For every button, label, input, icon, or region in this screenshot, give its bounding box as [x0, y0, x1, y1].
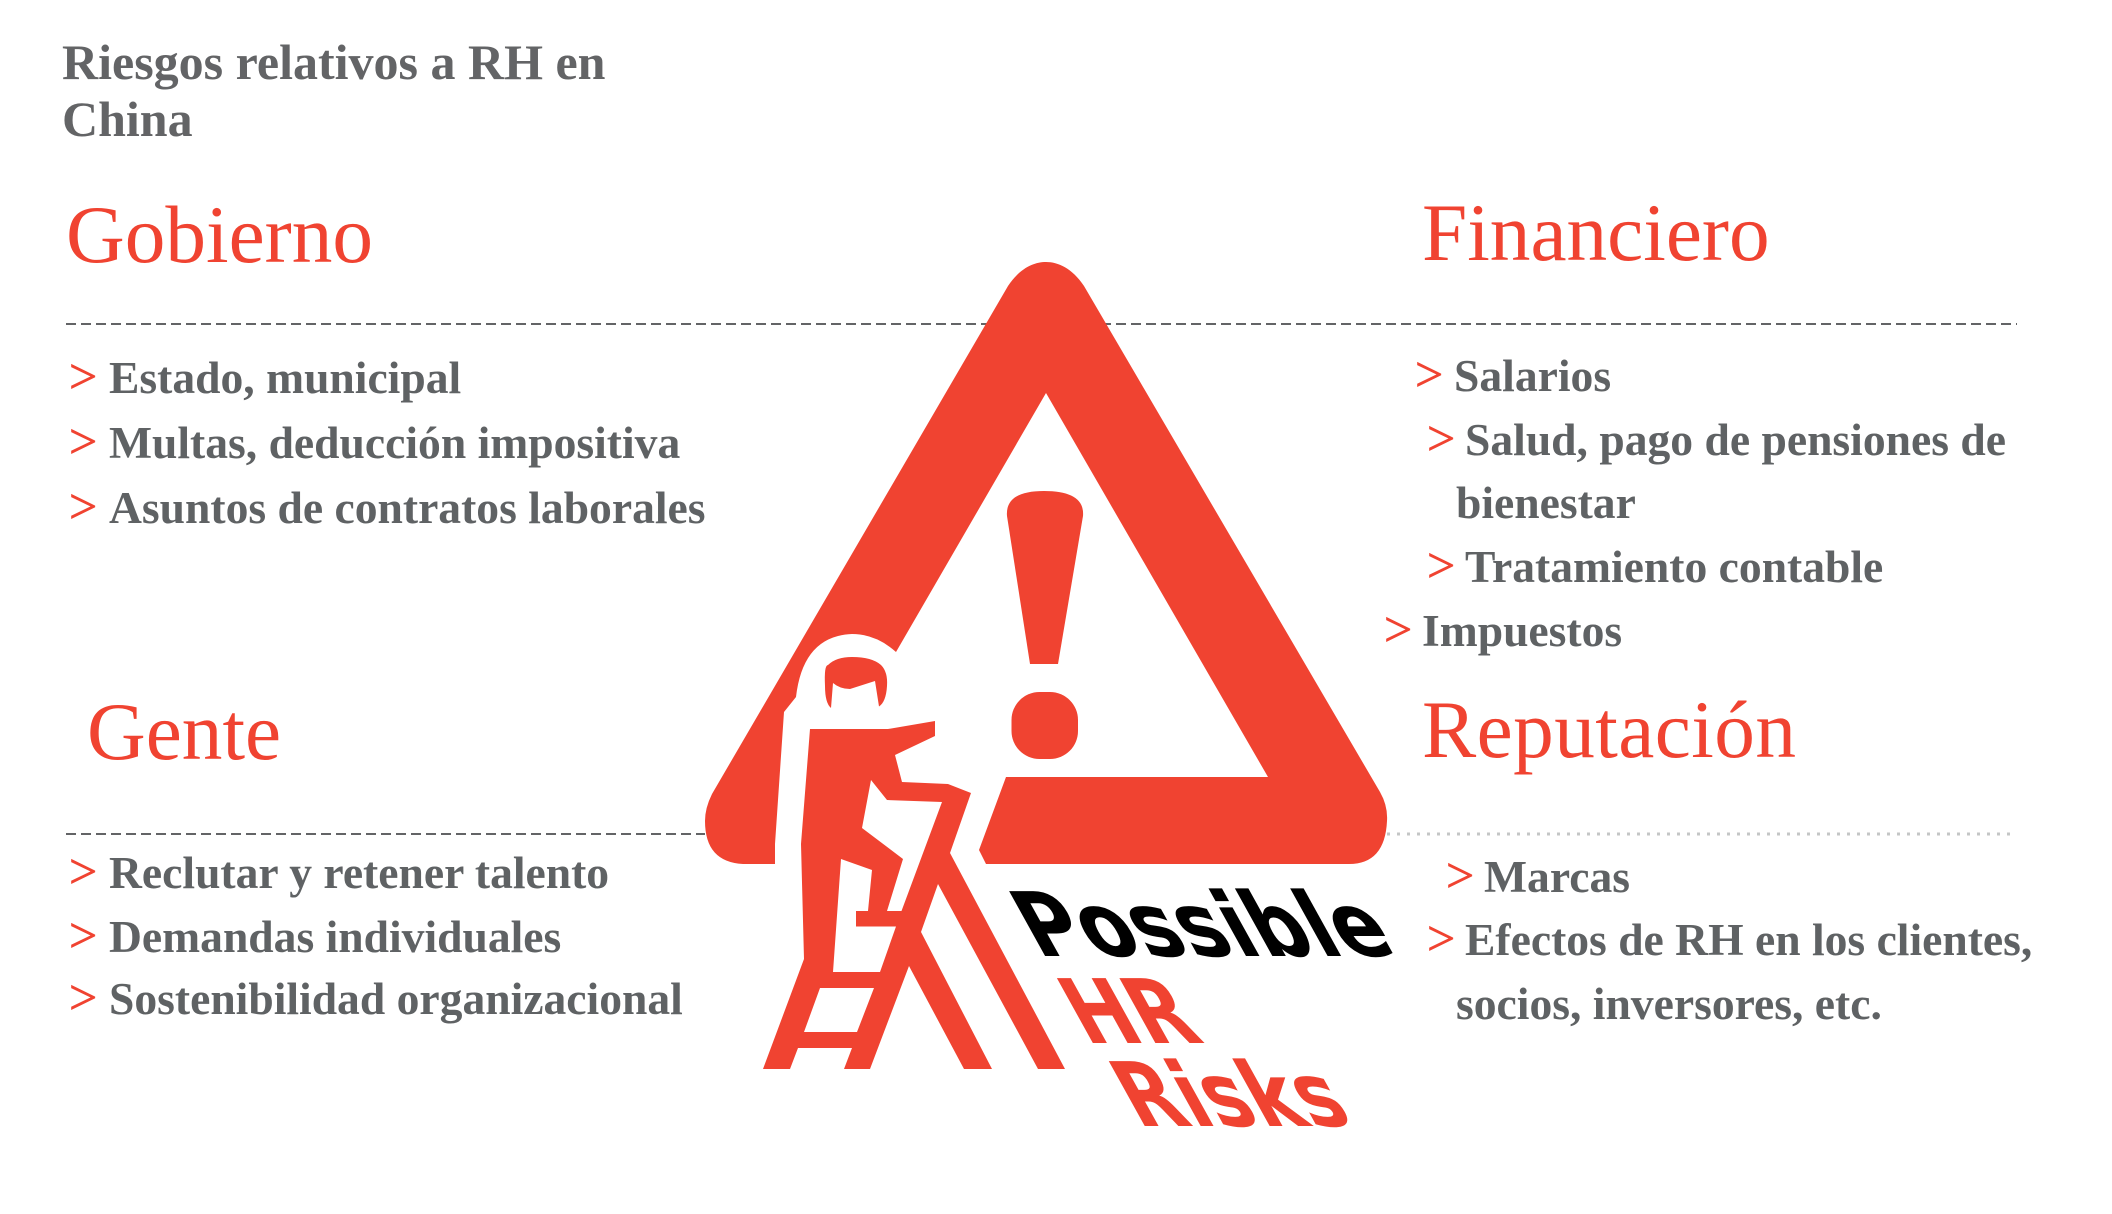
- list: Financiero items: Salarios: [1454, 350, 1611, 401]
- list: Financiero items: Impuestos: [1422, 605, 1622, 656]
- list: Gobierno items: >: [69, 348, 97, 404]
- list: Financiero items: bienestar: [1456, 477, 1636, 528]
- list: Gobierno items: [69, 348, 706, 534]
- panel: Gente: [69, 687, 683, 1025]
- list: Reputación items: >: [1427, 910, 1455, 966]
- list: Financiero items: >: [1427, 410, 1455, 466]
- text: Possible: Possible: [992, 873, 1412, 977]
- list: Gente items: >: [69, 907, 97, 963]
- list: Reputación items: Efectos de RH en los clientes,: [1465, 914, 2032, 965]
- list: Reputación items: socios, inversores, etc.: [1456, 978, 1882, 1029]
- list: Gobierno items: Estado, municipal: [109, 352, 461, 403]
- list: Gente items: >: [69, 843, 97, 899]
- list: Financiero items: [1384, 346, 2006, 657]
- list: Reputación items: Marcas: [1484, 851, 1630, 902]
- title: Riesgos relativos a RH en: [62, 34, 606, 90]
- list: Reputación items: >: [1446, 847, 1474, 903]
- text: HR: HR: [1040, 960, 1218, 1064]
- list: Financiero items: >: [1415, 346, 1443, 402]
- heading: Financiero: Financiero: [1422, 188, 1770, 278]
- list: Gobierno items: >: [69, 413, 97, 469]
- heading: Gente: Gente: [87, 687, 281, 777]
- heading: Gobierno: Gobierno: [66, 190, 373, 280]
- list: Financiero items: >: [1384, 601, 1412, 657]
- panel: Financiero: [1384, 188, 2006, 657]
- panel: Gobierno: [66, 190, 706, 534]
- panel: Reputación: [1422, 685, 2032, 1029]
- list: Gente items: [69, 843, 683, 1025]
- title: China: [62, 91, 193, 147]
- list: Gente items: >: [69, 969, 97, 1025]
- list: Gente items: Reclutar y retener talento: [109, 847, 609, 898]
- list: Financiero items: Salud, pago de pensiones de: [1465, 414, 2006, 465]
- icon: warning triangle with person on ladder: [705, 262, 1412, 1147]
- icon: warning triangle: [705, 262, 1387, 864]
- icon: person hair: [825, 657, 887, 708]
- text: Risks: Risks: [1092, 1043, 1368, 1147]
- list: Gobierno items: Asuntos de contratos laborales: [109, 482, 706, 533]
- list: Gente items: Sostenibilidad organizacional: [109, 973, 683, 1024]
- icon: exclamation mark: [1007, 491, 1083, 759]
- list: Reputación items: [1427, 847, 2032, 1029]
- icon: person and ladder: [763, 721, 1065, 1069]
- list: Financiero items: Tratamiento contable: [1465, 541, 1883, 592]
- list: Gente items: Demandas individuales: [109, 911, 561, 962]
- list: Financiero items: >: [1427, 537, 1455, 593]
- list: Gobierno items: >: [69, 478, 97, 534]
- heading: Reputación: Reputación: [1422, 685, 1796, 775]
- list: Gobierno items: Multas, deducción impositiva: [109, 417, 680, 468]
